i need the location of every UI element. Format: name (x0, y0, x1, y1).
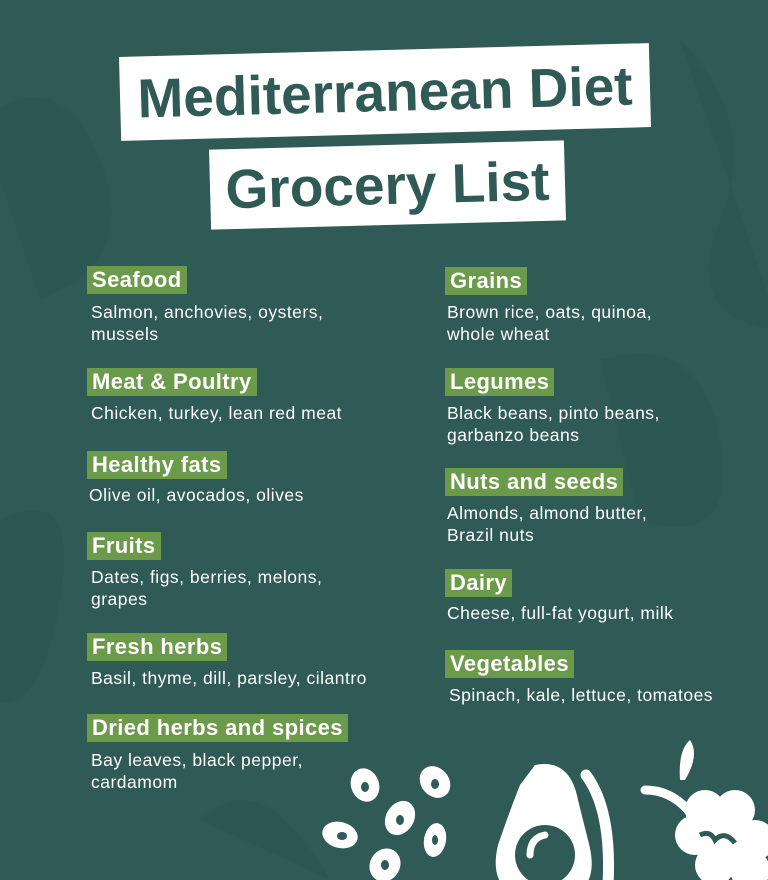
icon: avocado (496, 764, 614, 880)
left column: mussels (91, 324, 159, 344)
right column (445, 267, 713, 705)
right column: Black beans, pinto beans, (447, 403, 660, 423)
dried herbs: Dried herbs and spices (92, 715, 343, 740)
left column (87, 266, 367, 792)
fats: Healthy fats (92, 452, 222, 477)
right column: Brown rice, oats, quinoa, (447, 302, 652, 322)
right column: Brazil nuts (447, 525, 534, 545)
title line 2: Grocery List (225, 150, 550, 220)
left column: Chicken, turkey, lean red meat (91, 403, 342, 423)
fresh herbs: Fresh herbs (92, 634, 222, 659)
right column: Almonds, almond butter, (447, 503, 647, 523)
icon: beans (322, 766, 450, 880)
grains: Grains (450, 268, 522, 293)
right column: whole wheat (447, 324, 550, 344)
icon: grapes (640, 740, 768, 880)
right column: Spinach, kale, lettuce, tomatoes (449, 685, 713, 705)
fruits: Fruits (92, 533, 156, 558)
seafood: Seafood (92, 267, 182, 292)
dairy: Dairy (450, 570, 507, 595)
left column: Basil, thyme, dill, parsley, cilantro (91, 668, 367, 688)
left column: grapes (91, 589, 148, 609)
title line 1: Mediterranean Diet (137, 55, 633, 129)
nuts: Nuts and seeds (450, 469, 618, 494)
left column: Salmon, anchovies, oysters, (91, 302, 323, 322)
right column: Cheese, full-fat yogurt, milk (447, 603, 674, 623)
right column: garbanzo beans (447, 425, 580, 445)
left column: Olive oil, avocados, olives (89, 485, 304, 505)
meat: Meat & Poultry (92, 369, 252, 394)
legumes: Legumes (450, 369, 549, 394)
left column: cardamom (91, 772, 178, 792)
vegetables: Vegetables (450, 651, 569, 676)
left column: Bay leaves, black pepper, (91, 750, 303, 770)
left column: Dates, figs, berries, melons, (91, 567, 322, 587)
